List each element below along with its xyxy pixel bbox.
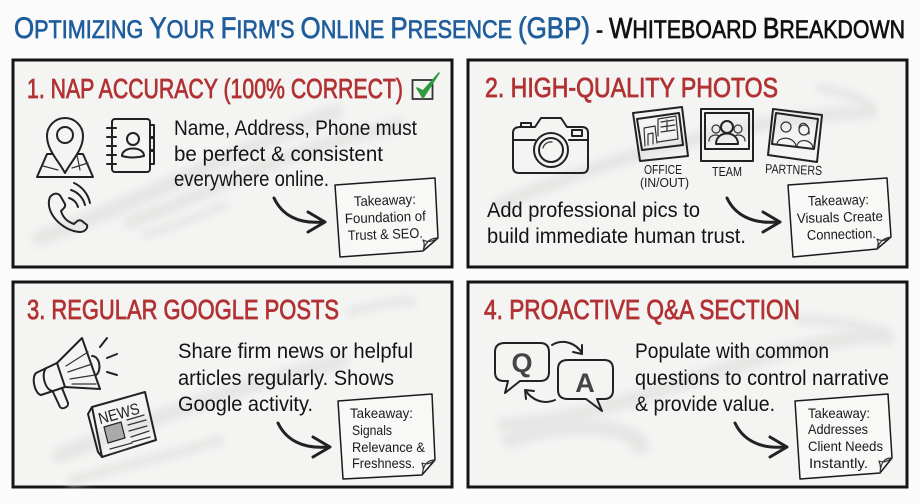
takeaway note: Takeaway: bbox=[808, 405, 870, 421]
takeaway note: Takeaway: bbox=[354, 191, 416, 209]
photo: team bbox=[701, 109, 753, 161]
body text: posts: Share firm news or helpful bbox=[178, 340, 413, 363]
body text: photos: Add professional pics to bbox=[487, 199, 700, 222]
takeaway note: Connection. bbox=[807, 225, 876, 243]
takeaway note: Client Needs bbox=[808, 438, 883, 454]
body text: posts bbox=[178, 340, 413, 416]
icon: phone bbox=[49, 183, 90, 232]
arrow to takeaway bbox=[727, 198, 780, 232]
body text: NAP accuracy bbox=[174, 117, 417, 191]
icon: map pin bbox=[37, 118, 93, 177]
body text: Q&A: questions to control narrative bbox=[635, 367, 889, 390]
panel: regular Google posts bbox=[13, 282, 452, 487]
takeaway note bbox=[795, 394, 892, 479]
title bbox=[14, 12, 905, 45]
photo labels: (IN/OUT) bbox=[640, 175, 689, 190]
takeaway note bbox=[338, 394, 435, 479]
icon: Q and A speech bubbles: A bbox=[575, 368, 595, 398]
takeaway note bbox=[788, 178, 891, 257]
body text: NAP accuracy: everywhere online. bbox=[174, 168, 329, 191]
body text: NAP accuracy: Name, Address, Phone must bbox=[174, 117, 417, 140]
icon: green check box bbox=[412, 73, 439, 99]
title: - WHITEBOARD BREAKDOWN bbox=[596, 13, 905, 45]
photo: office bbox=[633, 107, 688, 161]
heading: high-quality photos: 2. HIGH-QUALITY PHOTOS bbox=[485, 72, 778, 103]
icon: Q and A speech bubbles: Q bbox=[511, 348, 533, 378]
arrow to takeaway bbox=[274, 198, 325, 232]
takeaway note: Relevance & bbox=[352, 439, 426, 455]
takeaway note: Addresses bbox=[808, 421, 868, 437]
takeaway note: Freshness. bbox=[352, 455, 415, 471]
icon: address book bbox=[107, 119, 154, 172]
icon: newspaper: NEWS bbox=[97, 401, 142, 428]
icon: newspaper bbox=[88, 392, 156, 457]
takeaway note: Takeaway: bbox=[808, 191, 869, 209]
arrow to takeaway bbox=[278, 423, 330, 457]
heading: regular Google posts: 3. REGULAR GOOGLE POSTS bbox=[27, 294, 339, 325]
heading: proactive Q&A: 4. PROACTIVE Q&A SECTION bbox=[484, 294, 800, 325]
body text: photos: build immediate human trust. bbox=[487, 225, 746, 248]
photo labels: TEAM bbox=[712, 164, 742, 179]
photo labels: PARTNERS bbox=[765, 161, 823, 178]
icon: Q and A speech bubbles bbox=[495, 342, 613, 411]
body text: Q&A bbox=[635, 340, 889, 416]
body text: photos bbox=[487, 199, 746, 248]
takeaway note: Instantly. bbox=[809, 455, 868, 471]
title: OPTIMIZING YOUR FIRM'S ONLINE PRESENCE (GBP) bbox=[14, 12, 590, 45]
arrow to takeaway bbox=[735, 423, 787, 457]
takeaway note: Trust & SEO. bbox=[348, 225, 423, 243]
takeaway note: Foundation of bbox=[345, 208, 426, 226]
panel: NAP accuracy bbox=[13, 60, 452, 267]
takeaway note: Takeaway: bbox=[350, 405, 413, 421]
body text: NAP accuracy: be perfect & consistent bbox=[174, 143, 383, 166]
takeaway note: Signals bbox=[352, 422, 392, 438]
takeaway note bbox=[335, 178, 438, 257]
panel: proactive Q&A bbox=[468, 282, 907, 487]
photo labels: OFFICE bbox=[644, 162, 682, 177]
body text: posts: articles regularly. Shows bbox=[178, 367, 394, 390]
heading: NAP accuracy: 1. NAP ACCURACY (100% CORRECT) bbox=[27, 73, 403, 104]
photo: partners bbox=[768, 109, 822, 162]
body text: Q&A: Populate with common bbox=[635, 340, 829, 363]
takeaway note: Visuals Create bbox=[797, 208, 883, 226]
photo labels bbox=[640, 161, 823, 190]
body text: posts: Google activity. bbox=[178, 393, 313, 416]
icon: camera bbox=[513, 118, 588, 173]
body text: Q&A: & provide value. bbox=[635, 393, 775, 416]
panel: high-quality photos bbox=[468, 60, 907, 267]
icon: megaphone bbox=[34, 338, 117, 408]
